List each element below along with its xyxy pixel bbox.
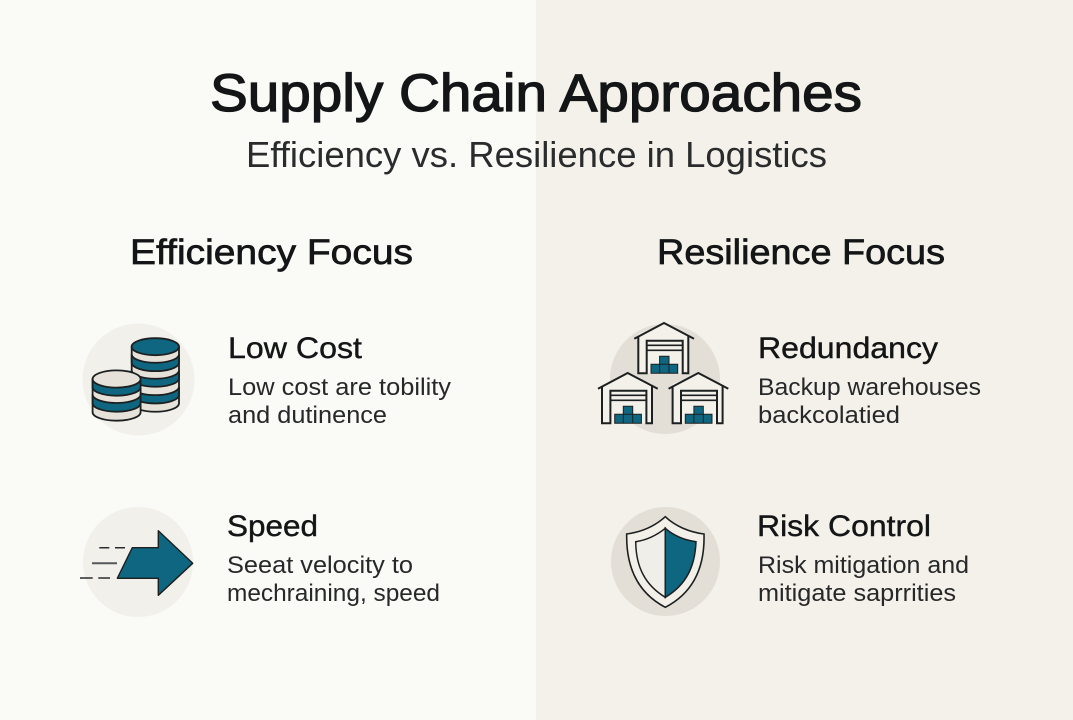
text: speed: Speed	[227, 510, 318, 543]
text: low cost: and dutinence	[228, 402, 387, 429]
icon: speed arrow	[80, 507, 193, 617]
text: speed: Seeat velocity to	[227, 552, 413, 579]
text: redundancy: Backup warehouses	[758, 374, 981, 401]
right warehouse	[669, 373, 728, 423]
heading: efficiency focus: Efficiency Focus	[130, 233, 413, 272]
text: risk control: mitigate saprrities	[758, 580, 956, 607]
text: speed	[227, 510, 440, 607]
text: redundancy	[758, 332, 981, 429]
text: risk control: Risk mitigation and	[758, 552, 969, 579]
text: speed: mechraining, speed	[227, 580, 440, 607]
top warehouse	[634, 323, 694, 373]
title: Supply Chain Approaches	[210, 64, 862, 123]
left warehouse	[598, 373, 658, 423]
icon: coin stacks	[82, 324, 194, 436]
icon: shield	[611, 507, 720, 616]
back coin stack	[132, 338, 179, 412]
text: risk control	[757, 510, 969, 607]
text: redundancy: backcolatied	[758, 402, 900, 429]
text: low cost	[228, 332, 451, 429]
front coin stack	[93, 370, 141, 421]
text: risk control: Risk Control	[757, 510, 931, 543]
panel: resilience background	[536, 0, 1073, 720]
heading: resilience focus: Resilience Focus	[657, 233, 945, 272]
icon: warehouses	[598, 323, 728, 434]
text: redundancy: Redundancy	[758, 332, 938, 365]
panel: efficiency background	[0, 0, 536, 720]
text: low cost: Low cost are tobility	[228, 374, 451, 401]
text: low cost: Low Cost	[228, 332, 362, 365]
subtitle: Efficiency vs. Resilience in Logistics	[246, 134, 827, 175]
